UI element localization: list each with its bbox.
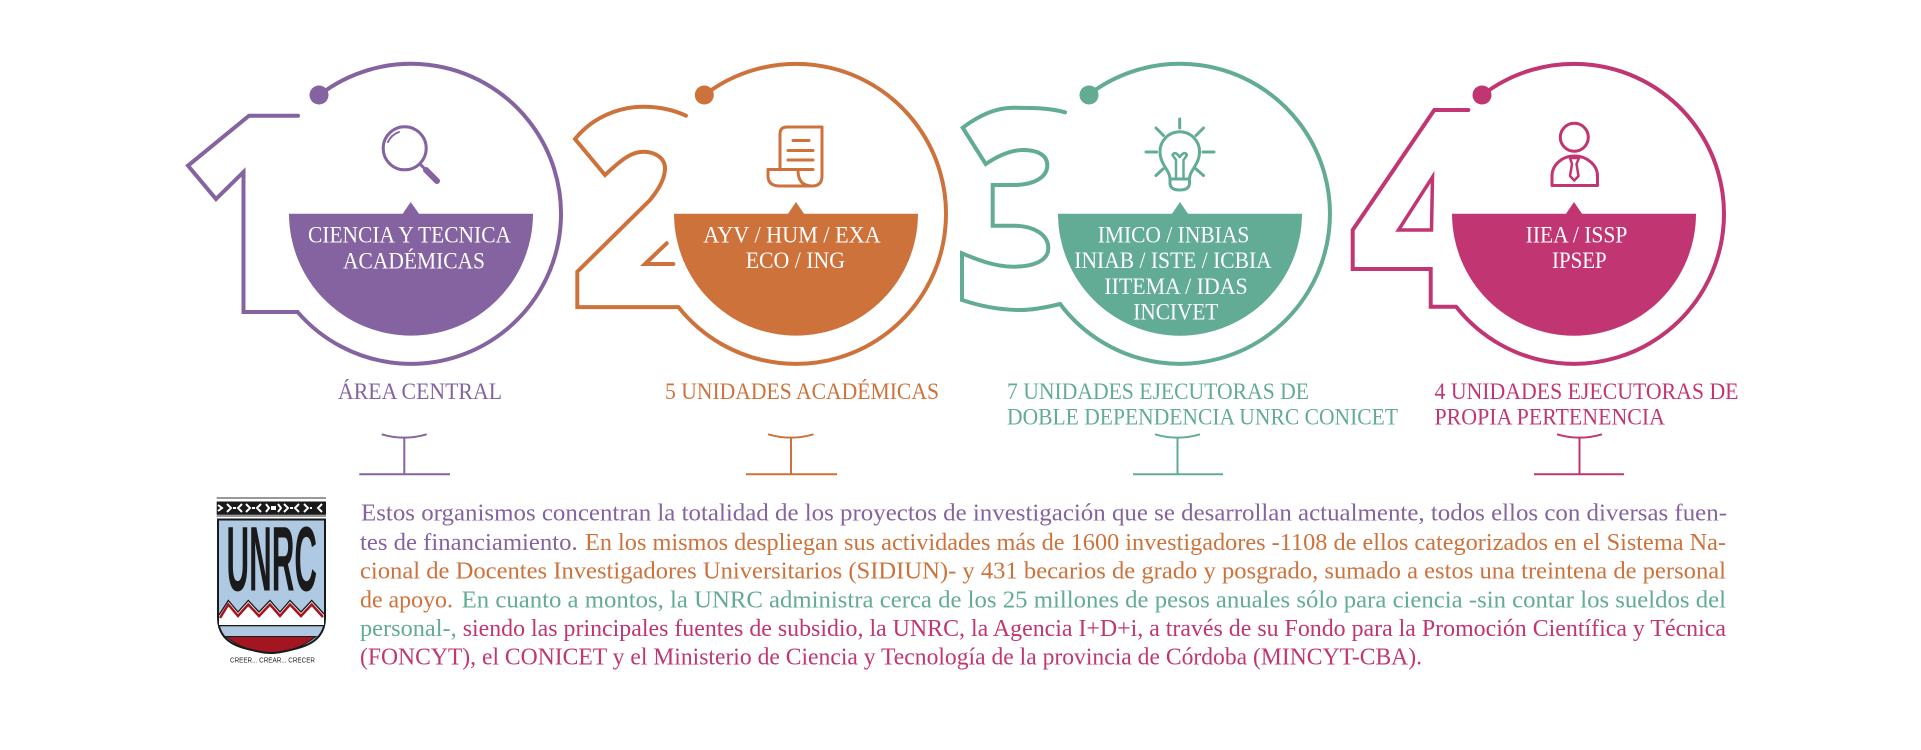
caption: 4 unidades ejecutoras: PROPIA PERTENENCIA [1434,404,1665,430]
label inside half circle [1074,223,1272,324]
label inside half circle: INIAB / ISTE / ICBIA [1074,248,1272,273]
icon: magnifying glass [383,127,437,181]
label inside half circle: CIENCIA Y TECNICA [308,223,511,248]
label inside half circle: IMICO / INBIAS [1098,223,1249,248]
text: UNRC [226,508,317,610]
icon: scroll document [768,127,822,186]
paragraph magenta: siendo las principales fuentes de subsidio, la UNRC, la Agencia I+D+i, a través de su Fondo para la Promoción Científica y Técnica [463,616,1726,642]
icon: person with tie [1552,123,1598,186]
panel: numero 4 unidades ejecutoras propia pertenencia [1353,64,1724,364]
ring dot [310,86,328,104]
numeral 2 and ring outline [575,64,946,364]
panel: numero 1 ciencia y tecnica [188,64,561,364]
shield red base [226,636,316,652]
label inside half circle: INCIVET [1133,299,1218,324]
caption: 7 unidades ejecutoras [1007,379,1398,430]
caption: 7 unidades ejecutoras: 7 UNIDADES EJECUTORAS DE [1007,379,1309,404]
label inside half circle: IIEA / ISSP [1526,223,1627,248]
half circle [674,202,918,336]
ring dot [695,86,714,104]
caption: 7 unidades ejecutoras: DOBLE DEPENDENCIA UNRC CONICET [1007,404,1398,430]
numeral 1 and ring outline [188,64,561,364]
label inside half circle: IPSEP [1552,248,1607,273]
paragraph purple: Estos organismos concentran la totalidad de los proyectos de investigación que se desarrollan actualmente, todos ellos con diversas fuen- [361,501,1727,527]
paragraph orange [360,530,1726,613]
label inside half circle: IITEMA / IDAS [1104,274,1248,299]
logo pattern band [217,498,326,516]
connector: orange [746,434,837,474]
paragraph magenta: (FONCYT), el CONICET y el Ministerio de Ciencia y Tecnología de la provincia de Córdoba (MINCYT-CBA). [360,645,1422,671]
paragraph magenta [360,616,1726,671]
paragraph green: En cuanto a montos, la UNRC administra cerca de los 25 millones de pesos anuales sólo para ciencia -sin contar los sueldos del [462,587,1726,613]
label inside half circle: ECO / ING [746,248,845,273]
half circle [289,202,533,336]
logo motto: CREER... CREAR... CRECER [230,656,315,665]
paragraph purple [360,501,1727,556]
shield mountains [219,600,324,625]
ring dot [1472,86,1492,104]
connector: magenta [1534,434,1624,474]
paragraph orange: En los mismos despliegan sus actividades más de 1600 investigadores -1108 de ellos categorizados en el Sistema Na- [585,530,1726,556]
paragraph green [360,587,1726,642]
half circle [1058,202,1302,336]
numeral 3 and ring outline [962,64,1330,364]
logo: UNRC shield [217,498,326,665]
caption: 5 unidades academicas: 5 UNIDADES ACADÉMICAS [665,379,939,404]
label inside half circle: ACADÉMICAS [343,249,485,274]
ring dot [1080,86,1098,104]
label inside half circle [703,223,881,273]
panel: numero 3 unidades ejecutoras doble dependencia [962,64,1330,364]
label inside half circle [1526,223,1627,273]
caption: 4 unidades ejecutoras: 4 UNIDADES EJECUTORAS DE [1434,379,1738,404]
half circle [1452,202,1696,336]
label inside half circle: AYV / HUM / EXA [703,223,881,248]
paragraph orange: de apoyo. [360,587,453,613]
icon: light bulb [1146,119,1214,190]
connector: green [1133,434,1223,474]
numeral 2 inner notch [645,243,673,264]
panel: numero 2 unidades academicas [575,64,946,364]
shield body [218,520,325,653]
label inside half circle [308,223,511,274]
paragraph green: personal-, [360,616,457,642]
connector: purple [359,434,450,474]
text block: description paragraph [360,501,1727,671]
numeral 4 inner triangle [1398,177,1432,230]
paragraph purple: tes de financiamiento. [360,530,578,556]
caption: area central: ÁREA CENTRAL [338,379,502,404]
numeral 4 and ring outline [1353,64,1724,364]
caption: 4 unidades ejecutoras [1434,379,1738,430]
paragraph orange: cional de Docentes Investigadores Universitarios (SIDIUN)- y 431 becarios de grado y posgrado, sumado a estos una treintena de personal [360,559,1726,585]
